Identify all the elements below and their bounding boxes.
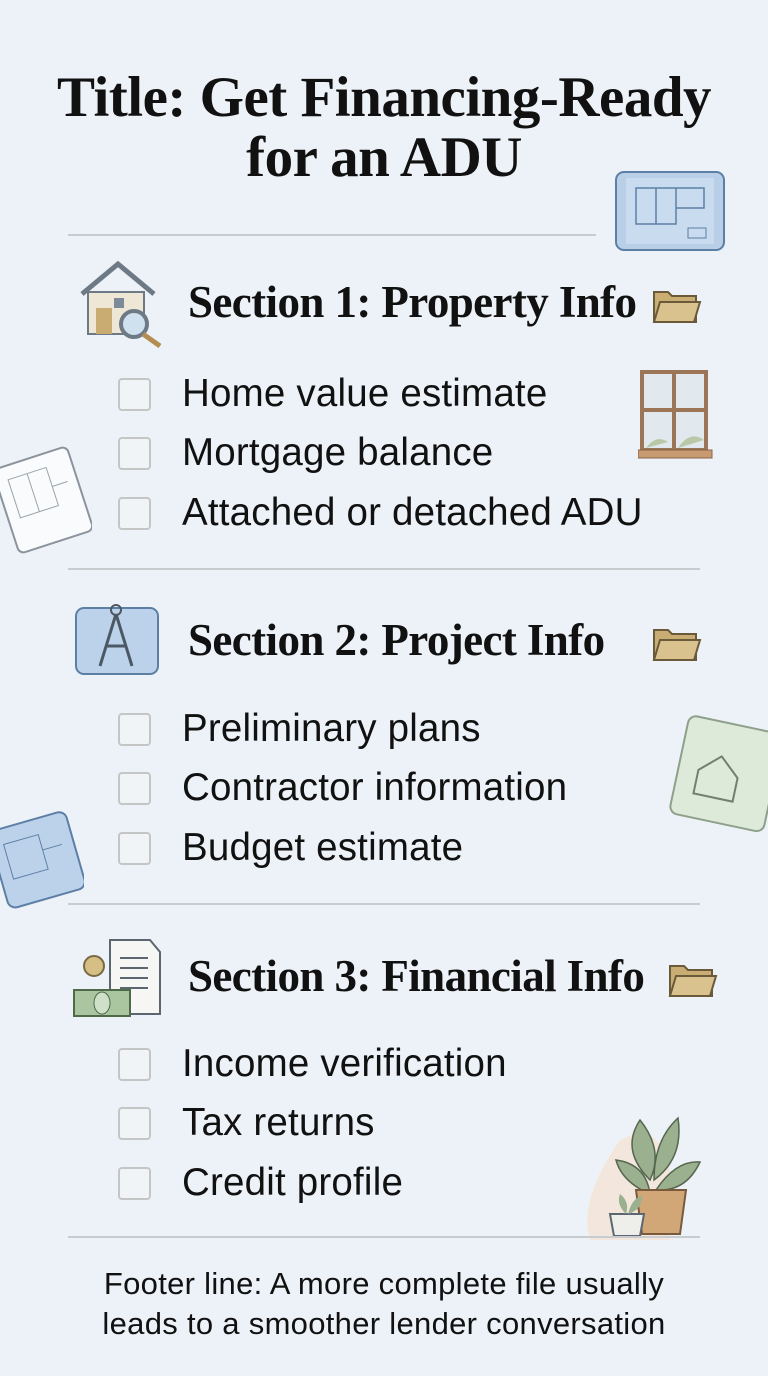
icon: folder <box>652 291 702 323</box>
icon: folder <box>668 965 718 997</box>
checklist: project: Contractor information <box>182 766 567 809</box>
icon: plants <box>587 1116 702 1240</box>
checklist: project: Budget estimate <box>182 826 463 869</box>
checklist: financial: Income verification <box>182 1042 507 1085</box>
section 1 <box>80 260 702 348</box>
icon: folder <box>652 629 702 661</box>
checklist: property: Mortgage balance <box>182 431 493 474</box>
heading: Section 2: Project Info <box>188 615 605 665</box>
footer: Footer line: A more complete file usually <box>104 1266 664 1301</box>
section 3 <box>73 939 718 1017</box>
section 2 <box>75 604 702 675</box>
checklist: property: Home value estimate <box>182 372 547 415</box>
decor: green blueprint right <box>669 715 768 832</box>
checklist: financial: Tax returns <box>182 1101 375 1144</box>
checklist: project: Preliminary plans <box>182 707 481 750</box>
icon: blueprint top right <box>615 171 725 251</box>
checklist: financial <box>118 1042 507 1204</box>
title <box>57 66 711 189</box>
checklist: property: Attached or detached ADU <box>182 491 643 534</box>
checklist: financial: Credit profile <box>182 1161 403 1204</box>
decor: blueprint left <box>0 446 92 554</box>
icon: money and document <box>73 939 161 1017</box>
icon: window <box>638 370 712 458</box>
heading: Section 3: Financial Info <box>188 951 644 1001</box>
checklist: project <box>118 707 567 869</box>
decor: blue blueprint left <box>0 811 84 908</box>
footer: leads to a smoother lender conversation <box>102 1306 666 1341</box>
footer <box>102 1266 666 1341</box>
title: for an ADU <box>246 126 522 189</box>
heading: Section 1: Property Info <box>188 277 636 327</box>
icon: house with magnifier <box>80 260 162 348</box>
checklist: property <box>118 372 643 534</box>
icon: compass blueprint <box>75 604 159 675</box>
title: Title: Get Financing-Ready <box>57 66 711 129</box>
